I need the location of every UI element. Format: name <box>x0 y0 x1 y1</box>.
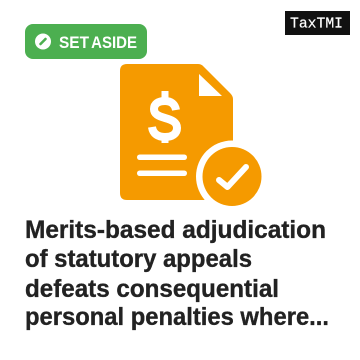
headline: Merits-based adjudication <box>25 216 326 244</box>
brand tag: TaxTMI <box>285 11 350 35</box>
badge label: SET <box>59 34 89 52</box>
icon: badge circle <box>35 34 51 50</box>
headline: of statutory appeals <box>25 245 252 273</box>
headline: defeats consequential <box>25 275 279 303</box>
text lines <box>137 154 187 176</box>
icon: invoice document with check <box>120 64 268 212</box>
badge label: ASIDE <box>88 34 137 52</box>
headline: personal penalties where... <box>25 303 329 331</box>
dollar sign <box>152 91 177 143</box>
status badge: set aside <box>25 24 147 59</box>
document fold <box>199 74 222 96</box>
brand tag: TaxTMI: TaxTMI <box>290 16 343 32</box>
headline <box>25 216 329 331</box>
check badge <box>196 140 268 212</box>
document body <box>120 64 233 200</box>
